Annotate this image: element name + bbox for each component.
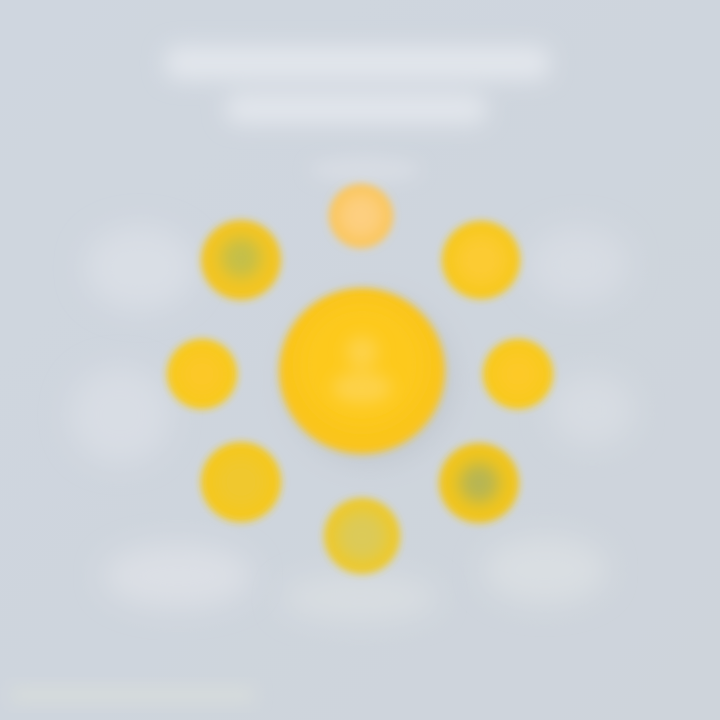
node: lower right xyxy=(439,443,519,523)
node: upper left xyxy=(201,220,281,300)
node: upper right xyxy=(442,221,520,299)
footer note xyxy=(10,686,255,704)
title xyxy=(165,46,550,124)
label: lower left xyxy=(104,544,252,608)
node: top xyxy=(329,184,393,248)
label: middle right xyxy=(550,374,634,446)
label: middle left xyxy=(70,367,170,463)
icon: central figure xyxy=(332,336,392,404)
node: lower left xyxy=(201,442,281,522)
label: upper right xyxy=(528,227,628,303)
node: bottom xyxy=(324,498,400,574)
label: lower right xyxy=(483,536,607,604)
label: upper left xyxy=(85,226,195,310)
node: left xyxy=(167,339,237,409)
node: right xyxy=(483,339,553,409)
label: top xyxy=(310,156,420,184)
central circle xyxy=(279,288,454,464)
label: bottom xyxy=(282,574,438,622)
